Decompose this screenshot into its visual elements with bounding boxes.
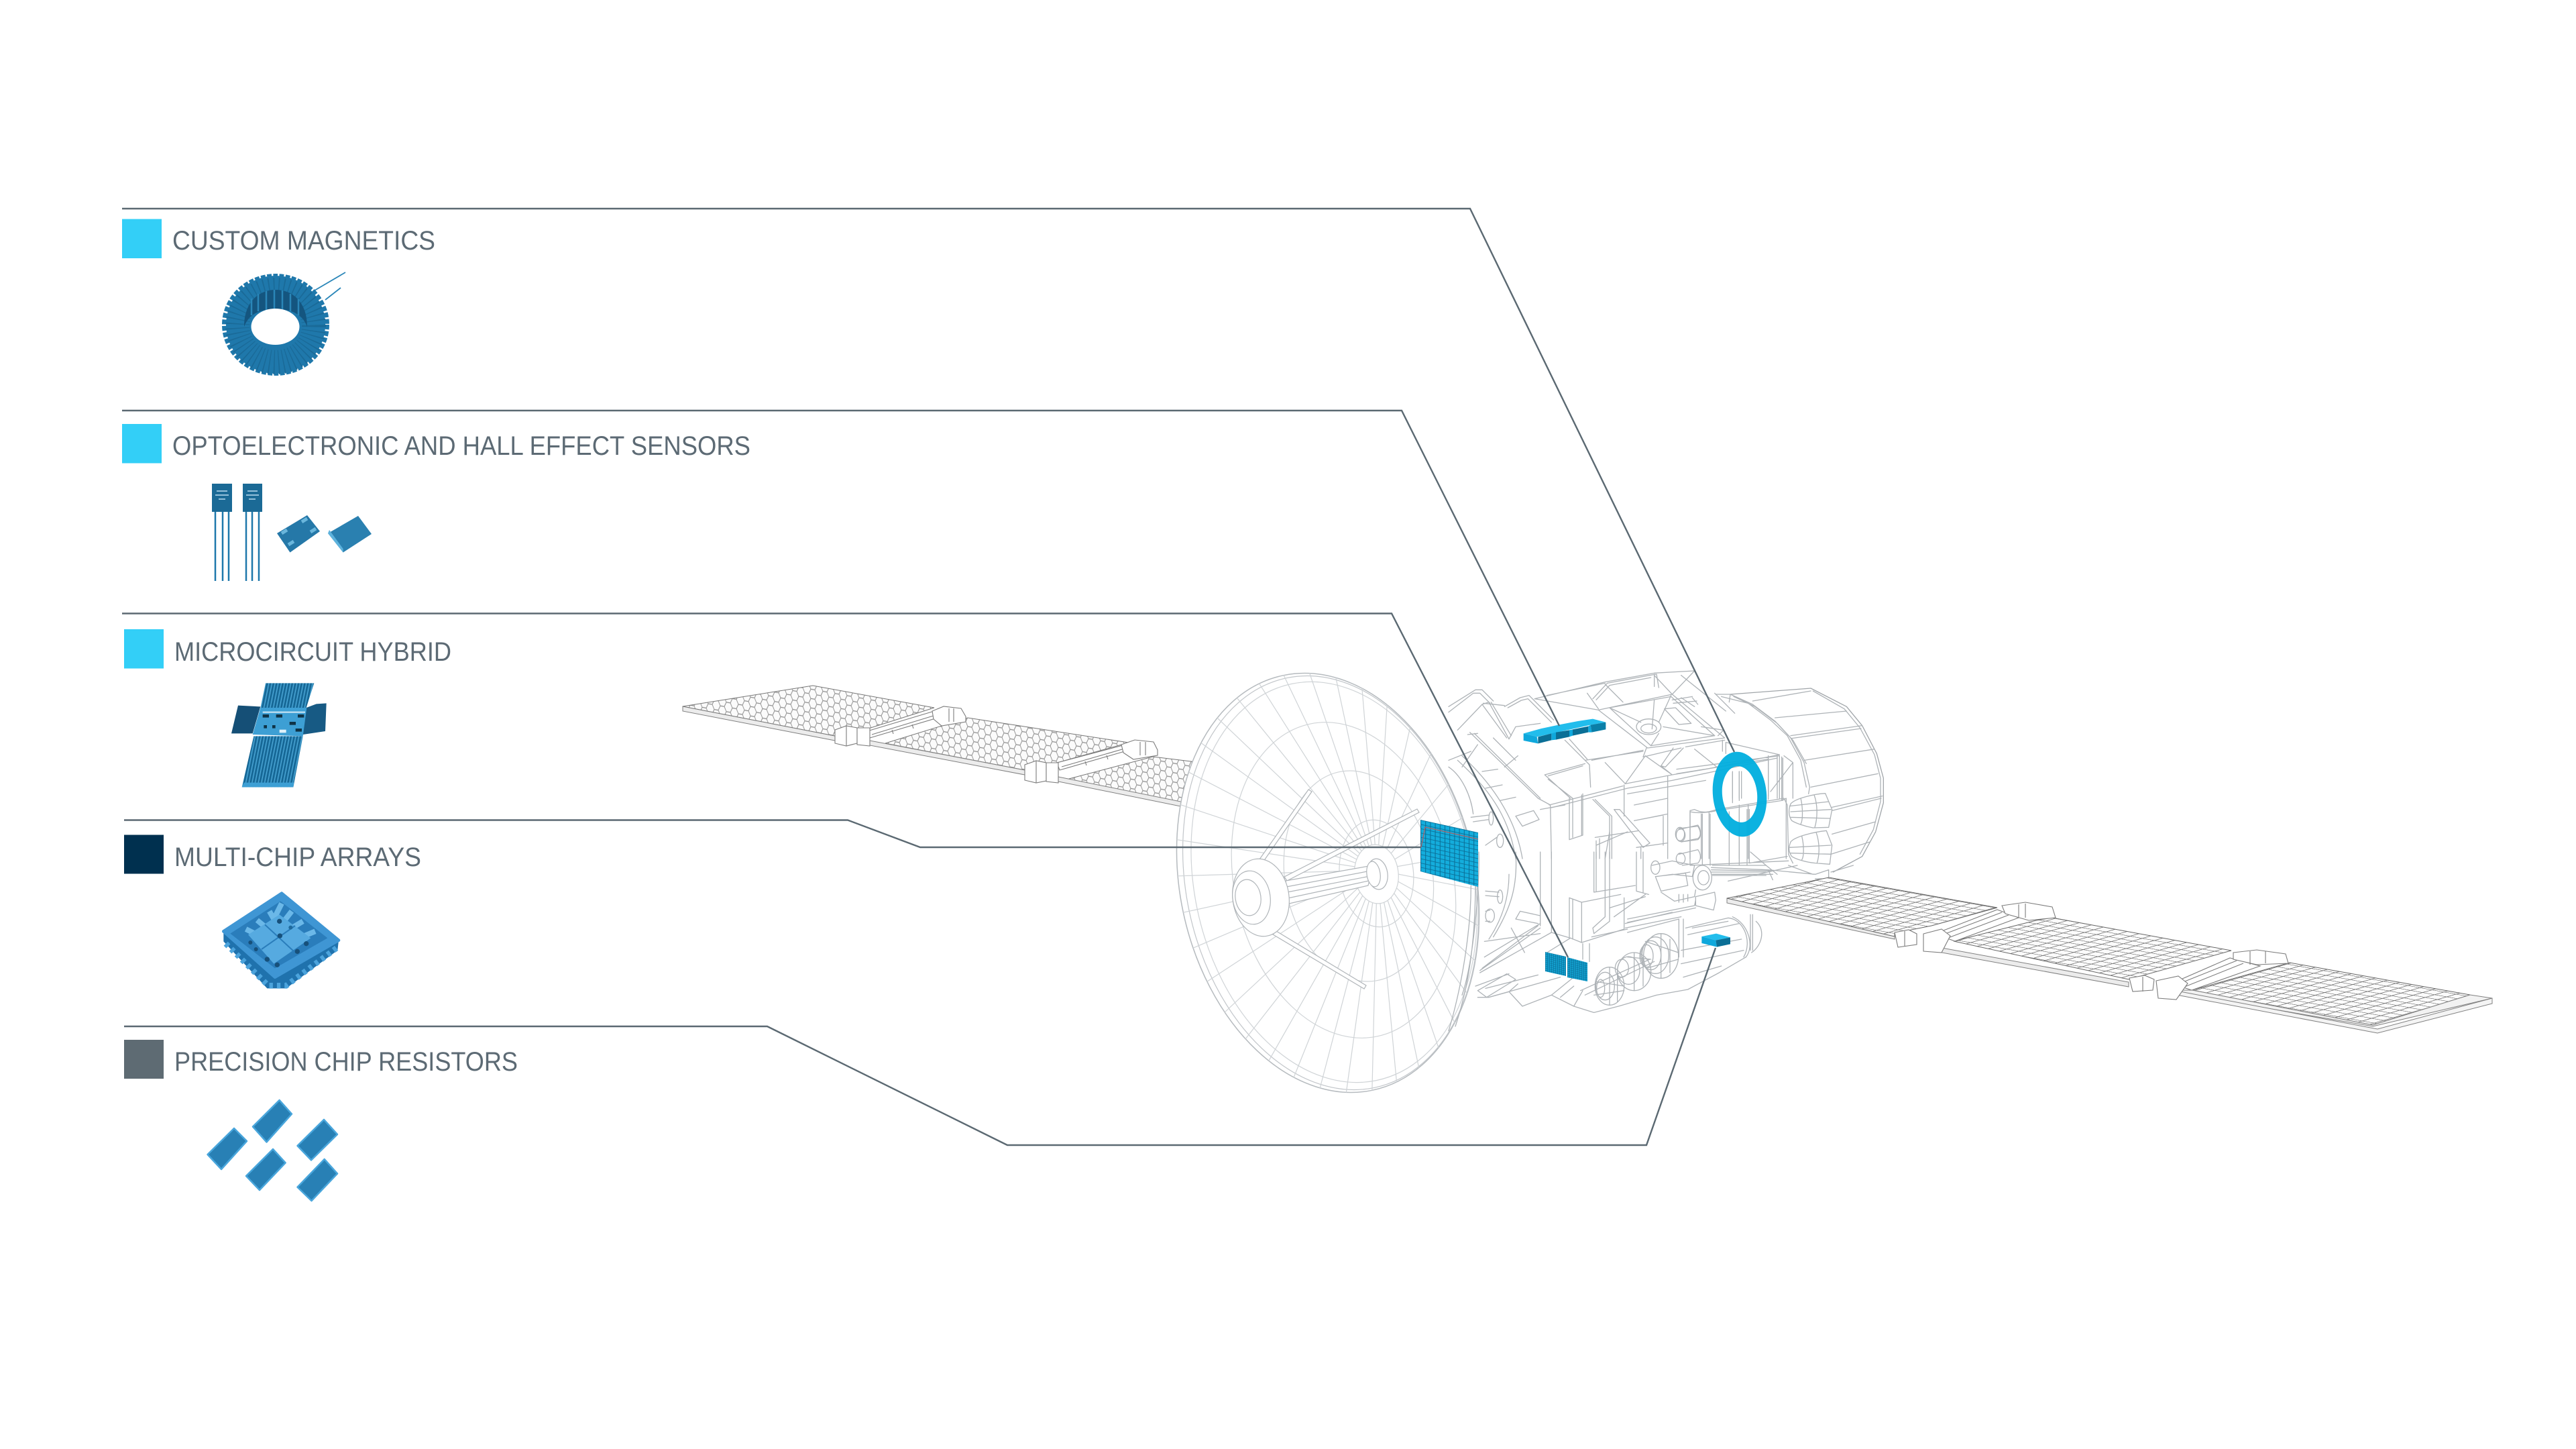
- highlight: microcircuit hybrid blocks: [1545, 952, 1587, 981]
- swatch: [124, 1040, 164, 1079]
- spacecraft body wireframe: [1449, 671, 1883, 1031]
- leader line: precision chip resistors: [124, 948, 1716, 1145]
- dish radial ribs: [1177, 674, 1479, 1092]
- heading: CUSTOM MAGNETICS: [172, 226, 435, 256]
- icon: toroid: [226, 272, 345, 374]
- right wing hinges: [1895, 902, 2288, 1000]
- heading: OPTOELECTRONIC AND HALL EFFECT SENSORS: [172, 431, 750, 461]
- legend: precision chip resistors: [124, 1040, 518, 1201]
- solar array: right wing: [1727, 877, 2492, 1033]
- icon: package: [223, 894, 339, 988]
- heading: PRECISION CHIP RESISTORS: [174, 1047, 518, 1077]
- leader line: sensors: [122, 411, 1559, 726]
- icon: resistors: [208, 1100, 337, 1201]
- rear drum wireframe: [1676, 688, 1883, 880]
- highlight: multi-chip array on dish: [1420, 820, 1478, 887]
- leader line: multi-chip arrays: [124, 820, 1421, 847]
- antenna feed and struts: [1227, 790, 1419, 989]
- heading: MICROCIRCUIT HYBRID: [174, 637, 451, 667]
- swatch: [124, 835, 164, 873]
- leader line: microcircuit hybrid: [122, 613, 1568, 957]
- left wing hinges: [835, 706, 1158, 783]
- icon: sensors: [212, 484, 372, 581]
- legend: custom magnetics: [122, 219, 435, 374]
- lower section and thrusters wireframe: [1449, 852, 1797, 1031]
- solar array: left wing: [683, 686, 1207, 812]
- swatch: [122, 424, 162, 463]
- dish antenna: [1139, 646, 1517, 1120]
- heading: MULTI-CHIP ARRAYS: [174, 843, 421, 872]
- swatch: [124, 629, 164, 668]
- swatch: [122, 219, 162, 258]
- legend: microcircuit hybrid: [124, 629, 451, 787]
- highlight: optoelectronic sensors: [1524, 719, 1606, 743]
- icon: hybrid: [231, 683, 327, 787]
- upper hull wireframe: [1449, 671, 1786, 859]
- highlight: precision chip resistor: [1701, 934, 1730, 947]
- legend: optoelectronic and hall effect sensors: [122, 424, 750, 581]
- legend: multi-chip arrays: [124, 835, 421, 988]
- leader line: custom magnetics: [122, 209, 1734, 752]
- highlight: custom magnetics ring: [1709, 749, 1771, 839]
